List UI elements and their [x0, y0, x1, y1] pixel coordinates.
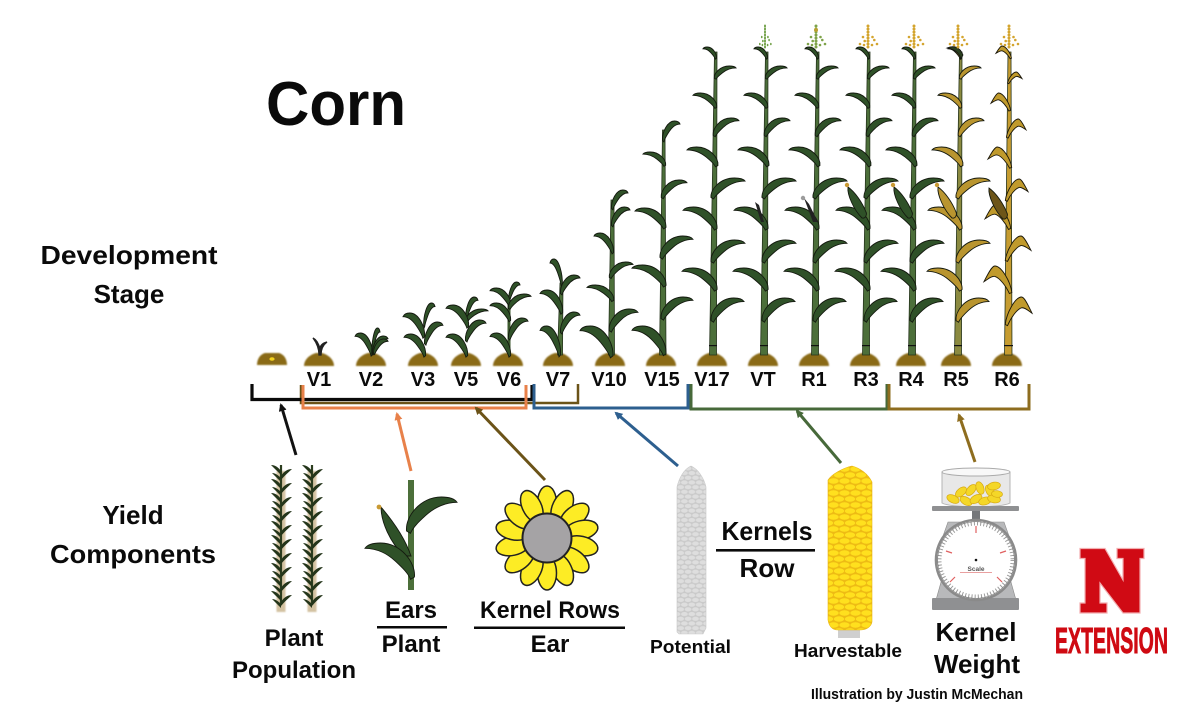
text: kernels per row: [716, 516, 815, 583]
text: plant population: Population: [232, 657, 356, 684]
text: kernels per row: Kernels: [722, 516, 812, 546]
icon: plant with ear: [365, 480, 457, 590]
text: kernel weight: Weight: [934, 649, 1020, 679]
logo: Nebraska Extension: [1055, 548, 1168, 661]
bracket: green V17 to R3: [691, 384, 887, 409]
stage labels: VT: [750, 369, 776, 391]
text: potential: Potential: [650, 636, 731, 657]
dial: [936, 520, 1016, 600]
text: kernel rows per ear: Kernel Rows: [480, 597, 620, 624]
bracket: blue V7 to V15: [534, 384, 688, 408]
plant: V1: [304, 338, 334, 366]
arrow: kernel weight: [959, 415, 975, 462]
plant: R3: [835, 24, 898, 366]
bracket: black seed to V6: [252, 384, 532, 400]
stage labels: V15: [644, 369, 680, 391]
body: [936, 522, 1016, 600]
bracket: brown V1 to V7: [301, 384, 578, 403]
stage labels: [307, 369, 1020, 391]
stage labels: V17: [694, 369, 730, 391]
title: Corn: [266, 70, 406, 139]
plant: R4: [881, 24, 944, 366]
text: ears per plant: Ears: [385, 597, 437, 624]
stage labels: V5: [454, 369, 478, 391]
text: harvestable: Harvestable: [794, 640, 902, 661]
growth stage plants: [257, 24, 1032, 366]
text: kernel rows per ear: Ear: [531, 631, 569, 658]
text: kernels per row: Row: [740, 553, 795, 583]
plant: V2: [355, 328, 388, 366]
icon: ear cross-section: [494, 486, 600, 590]
icon: plant population rows: [271, 465, 323, 612]
stage labels: V3: [411, 369, 435, 391]
plant: V3: [403, 303, 443, 366]
stage labels: R3: [853, 369, 879, 391]
arrow: harvestable kernels: [797, 411, 841, 463]
heading: development stage: Development: [40, 240, 218, 270]
text: plant population: Plant: [265, 625, 323, 652]
bowl: [942, 472, 1010, 507]
arrow: ears per plant: [397, 414, 411, 471]
text: ears per plant: [377, 597, 447, 658]
icon: harvestable corn cob: [828, 466, 872, 638]
stage labels: V1: [307, 369, 331, 391]
stage labels: V7: [546, 369, 570, 391]
text: kernel weight: [934, 617, 1020, 679]
arrow: plant population: [281, 405, 296, 455]
plant: V6: [490, 282, 531, 366]
plant: R1: [784, 24, 847, 366]
plant: V17: [682, 47, 745, 366]
stage brackets: [252, 384, 1029, 409]
plant: V15: [632, 121, 693, 366]
plant: V7: [540, 259, 580, 366]
bracket: gold R4 to R6: [889, 384, 1029, 409]
plant: R6: [984, 24, 1032, 366]
icon: potential corn cob: [677, 466, 706, 634]
text: kernel weight: Kernel: [936, 617, 1016, 647]
text: kernel rows per ear: [474, 597, 625, 658]
plate: [932, 506, 1019, 511]
icon: kernel scale: [932, 468, 1019, 610]
kernels in bowl: [946, 481, 1003, 508]
heading: yield components: Components: [50, 539, 216, 569]
seed in soil: [257, 353, 287, 365]
stage labels: R5: [943, 369, 969, 391]
text: plant population: [232, 625, 356, 684]
plant: V10: [580, 190, 638, 366]
arrow: kernel rows: [476, 408, 545, 480]
stage labels: R6: [994, 369, 1020, 391]
arrow: potential kernels: [616, 413, 678, 466]
heading: yield components: Yield: [102, 500, 164, 530]
heading: yield components: [50, 500, 216, 569]
icon: kernel scale: Scale: [968, 566, 985, 573]
stage labels: V10: [591, 369, 627, 391]
bracket: orange V1 to V6: [303, 385, 526, 408]
text: ears per plant: Plant: [382, 631, 440, 658]
icon: letter N: [1080, 548, 1144, 613]
plant: V5: [446, 297, 488, 366]
plant: VT: [733, 24, 796, 366]
stage labels: R1: [801, 369, 827, 391]
stage labels: V2: [359, 369, 383, 391]
heading: development stage: [40, 240, 218, 309]
text: illustration credit: Illustration by Justin McMechan: [811, 687, 1023, 703]
stage labels: R4: [898, 369, 925, 391]
stage labels: V6: [497, 369, 521, 391]
heading: development stage: Stage: [94, 279, 164, 309]
plant: R5: [927, 24, 990, 366]
